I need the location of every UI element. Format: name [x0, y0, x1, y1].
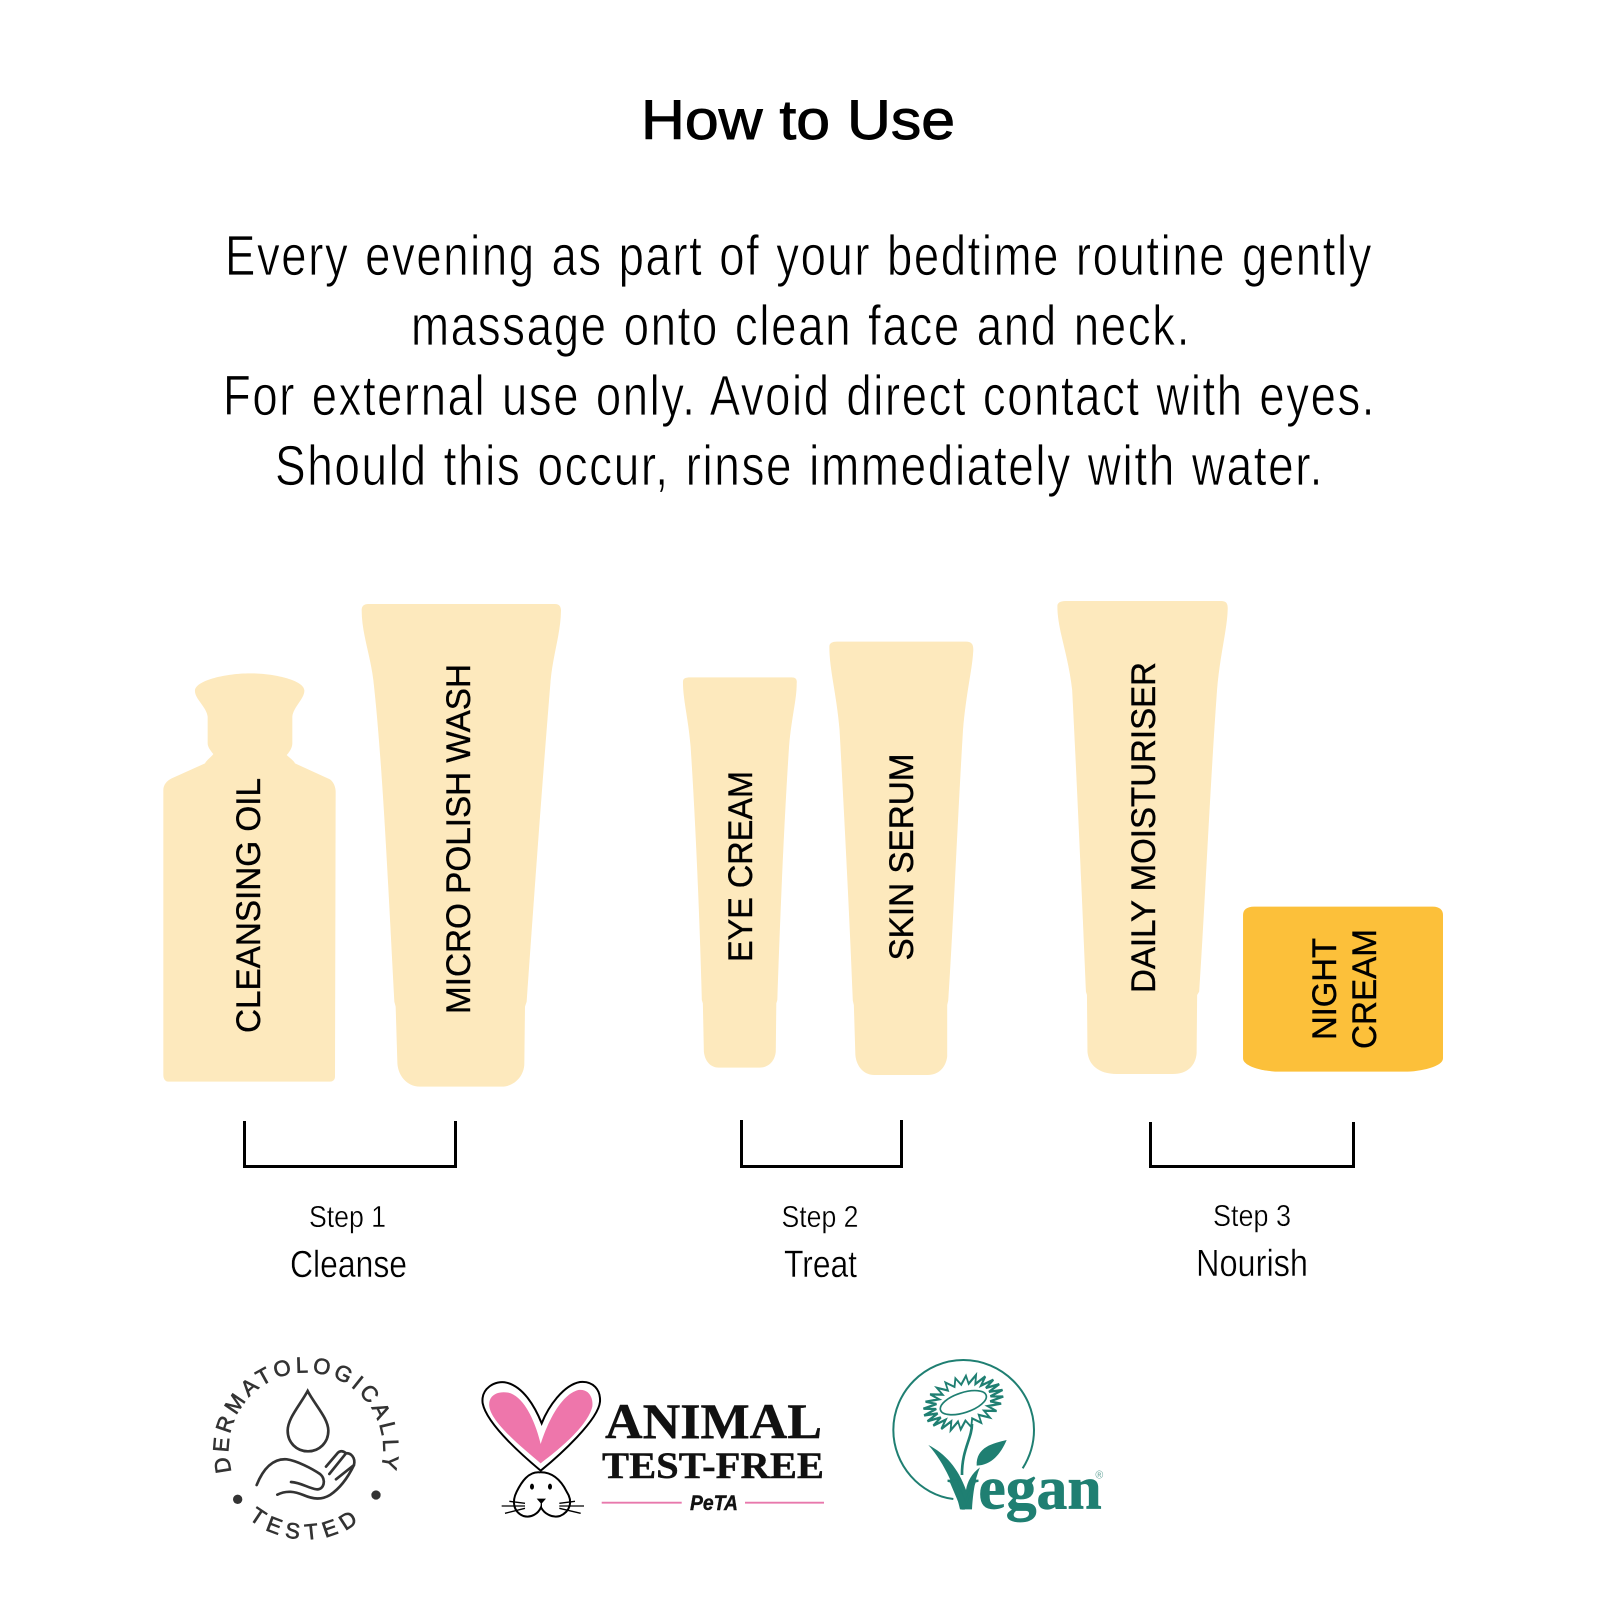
badge: dermatologically tested: TESTED — [252, 1506, 356, 1540]
instructions text block — [223, 224, 1376, 498]
badge: vegan society: ® — [1095, 1469, 1103, 1481]
badge: dermatologically tested: DERMATOLOGICALLY — [212, 1357, 399, 1473]
step 1 label: Step 1 — [309, 1199, 386, 1234]
product: eye cream tube — [683, 677, 797, 1068]
title: How to Use — [641, 88, 955, 151]
product: daily moisturiser tube — [1057, 601, 1228, 1074]
step 2 name: Treat — [784, 1244, 857, 1286]
product: night cream jar — [1243, 907, 1443, 1072]
instructions text block: massage onto clean face and neck. — [411, 294, 1191, 358]
step 3 name: Nourish — [1196, 1243, 1308, 1285]
product: skin serum tube — [829, 642, 973, 1075]
badge: vegan society: V — [947, 1470, 979, 1518]
step 1 group — [244, 1121, 456, 1286]
step 3 group — [1150, 1122, 1354, 1285]
badge: dermatologically tested — [212, 1357, 399, 1540]
step 1 name: Cleanse — [290, 1244, 407, 1286]
bracket: step 2 — [742, 1120, 902, 1166]
product: eye cream tube: EYE CREAM — [722, 771, 760, 962]
badge: vegan society — [893, 1360, 1103, 1522]
product: cleansing oil bottle — [163, 673, 336, 1082]
step 2 label: Step 2 — [782, 1199, 858, 1234]
bracket: step 1 — [244, 1121, 456, 1166]
product: night cream jar: NIGHT — [1306, 938, 1344, 1040]
badge: peta animal test-free: PeTA — [690, 1492, 738, 1515]
instructions text block: Should this occur, rinse immediately with water. — [275, 434, 1324, 498]
icon: peta bunny — [482, 1382, 600, 1517]
bracket: step 3 — [1150, 1122, 1354, 1166]
product: daily moisturiser tube: DAILY MOISTURISER — [1125, 662, 1163, 993]
step 2 group — [742, 1120, 902, 1286]
product: skin serum tube: SKIN SERUM — [883, 754, 921, 960]
product: micro polish wash tube: MICRO POLISH WASH — [440, 664, 478, 1014]
badge: peta animal test-free: TEST-FREE — [602, 1446, 824, 1487]
badge: peta animal test-free — [482, 1382, 824, 1517]
peta wordmark: ANIMAL — [605, 1393, 822, 1449]
product: cleansing oil bottle: CLEANSING OIL — [230, 778, 268, 1033]
badge: vegan society: egan — [978, 1454, 1102, 1522]
products row — [163, 601, 1443, 1087]
step 3 label: Step 3 — [1213, 1198, 1291, 1233]
product: night cream jar: CREAM — [1346, 929, 1384, 1049]
product: micro polish wash tube — [362, 604, 561, 1087]
